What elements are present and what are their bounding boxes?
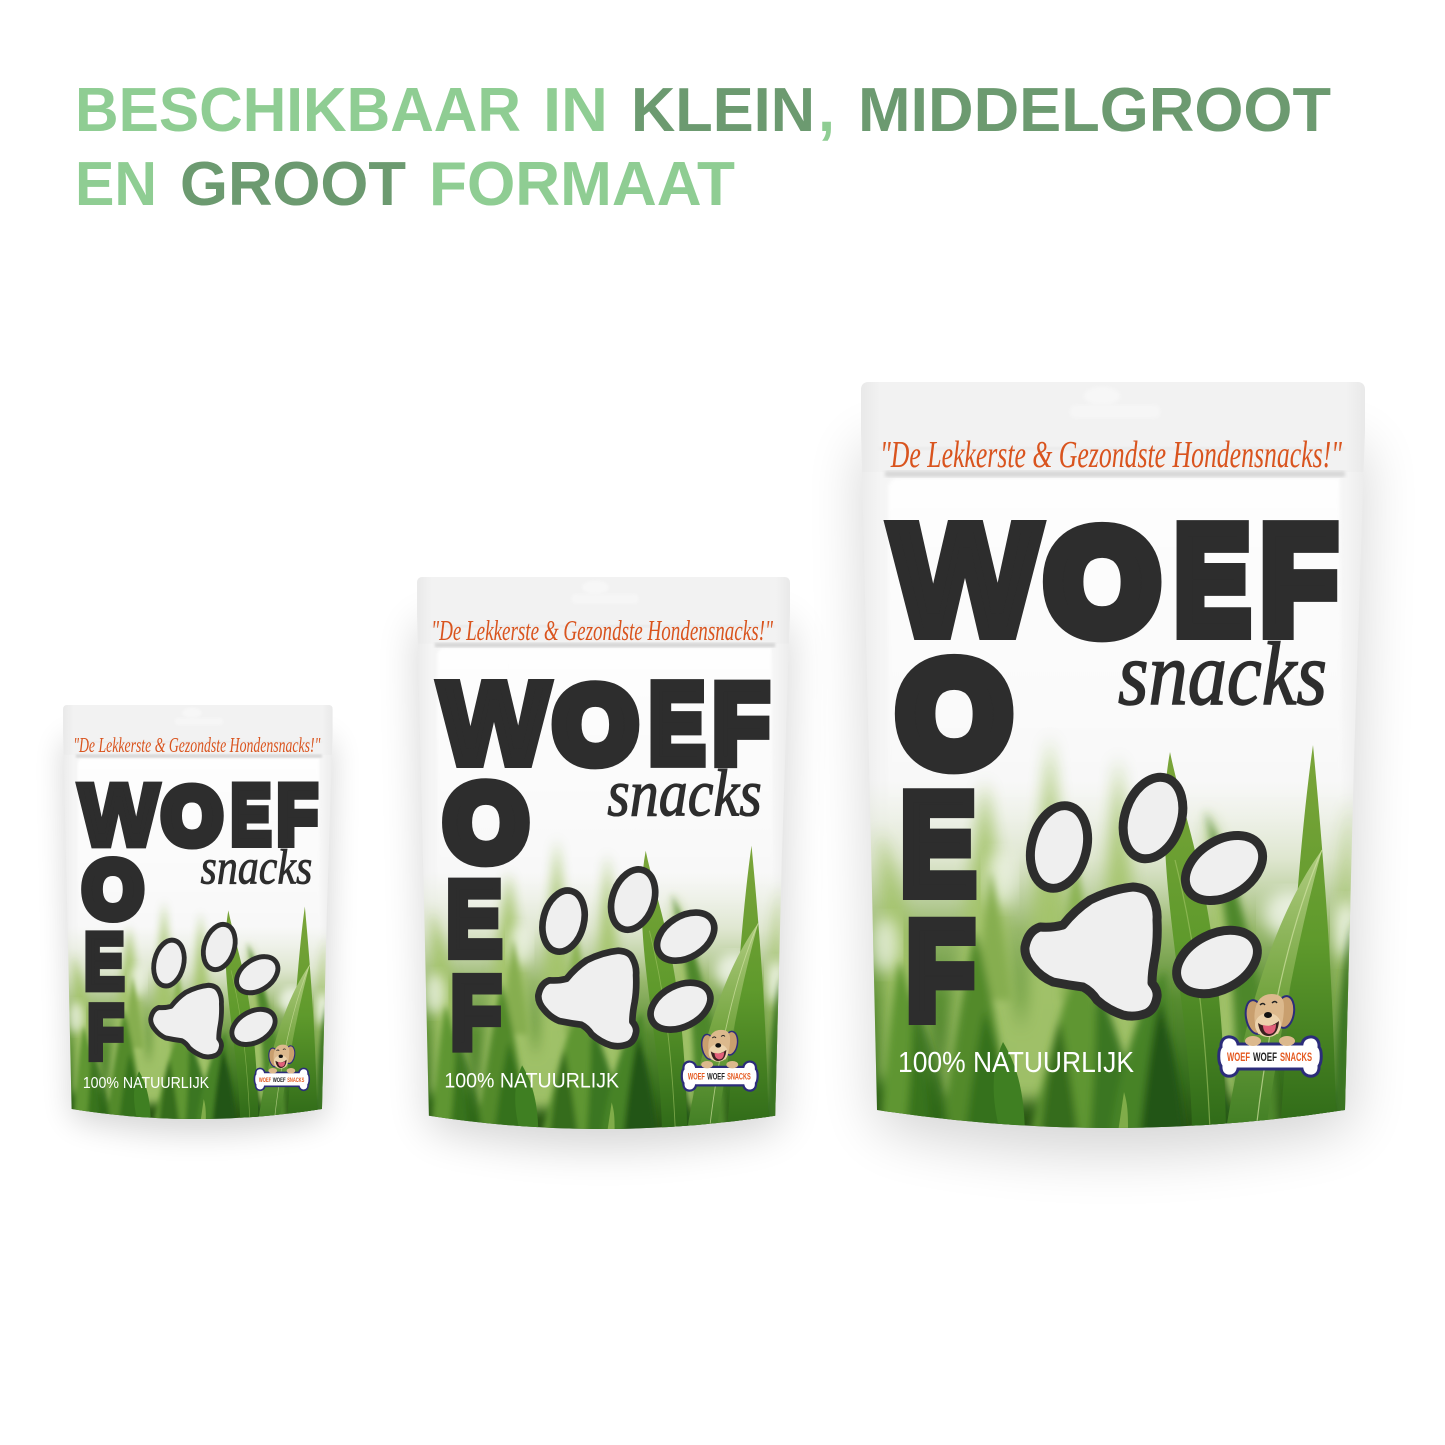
logo: dog on bone: WOEF — [1227, 1050, 1250, 1064]
brand word OEF vertical: F — [451, 957, 501, 1070]
title — [75, 76, 1331, 219]
logo: dog on bone — [254, 1045, 309, 1090]
tagline: "De Lekkerste & Gezondste Hondensnacks!" — [431, 616, 773, 647]
title: KLEIN — [631, 76, 815, 145]
brand word WOEF horizontal: F — [1261, 495, 1337, 664]
title: IN — [543, 76, 608, 145]
logo: dog on bone: WOEF — [1253, 1050, 1277, 1064]
brand word WOEF horizontal — [79, 767, 317, 864]
natural label: 100% NATUURLIJK — [83, 1075, 210, 1092]
snacks lettering: snacks — [1118, 625, 1327, 724]
brand word WOEF horizontal: O — [1047, 503, 1157, 662]
tagline: "De Lekkerste & Gezondste Hondensnacks!" — [73, 735, 321, 757]
brand word OEF vertical: F — [907, 895, 974, 1048]
panel: medium pouch — [413, 574, 794, 1148]
brand word OEF vertical: E — [447, 861, 502, 978]
brand word OEF vertical — [899, 635, 1009, 1048]
brand word WOEF horizontal: F — [277, 768, 317, 862]
brand word WOEF horizontal: O — [555, 667, 636, 784]
panel: small pouch — [60, 703, 336, 1133]
panel: large pouch — [855, 378, 1371, 1154]
brand word WOEF horizontal: W — [891, 493, 1040, 668]
title: EN — [75, 150, 157, 219]
title: BESCHIKBAAR — [75, 76, 521, 145]
title: GROOT — [180, 150, 406, 219]
brand word WOEF horizontal: E — [649, 661, 705, 786]
brand word OEF vertical: O — [899, 635, 1009, 794]
logo: dog on bone — [1219, 994, 1321, 1076]
logo: dog on bone: WOEF — [688, 1071, 705, 1081]
logo: dog on bone — [682, 1030, 758, 1091]
natural label: 100% NATUURLIJK — [898, 1047, 1135, 1079]
title: FORMAAT — [429, 150, 735, 219]
brand word OEF vertical: O — [83, 846, 142, 934]
brand word WOEF horizontal: F — [713, 661, 769, 786]
brand word WOEF horizontal: O — [163, 773, 222, 861]
natural label: 100% NATUURLIJK — [444, 1069, 620, 1093]
brand word WOEF horizontal: W — [439, 658, 549, 788]
logo: dog on bone: WOEF — [273, 1077, 286, 1084]
logo: dog on bone: SNACKS — [727, 1071, 751, 1081]
icon: paw print — [1022, 769, 1274, 1016]
brand word OEF vertical: E — [901, 765, 975, 924]
brand word WOEF horizontal: E — [1175, 495, 1250, 664]
logo: dog on bone: WOEF — [259, 1077, 271, 1084]
brand word OEF vertical: E — [84, 918, 124, 1006]
brand word OEF vertical: F — [88, 989, 123, 1074]
logo: dog on bone: SNACKS — [1280, 1050, 1312, 1064]
logo: dog on bone: WOEF — [707, 1071, 725, 1081]
icon: paw print — [149, 920, 284, 1057]
snacks lettering: snacks — [201, 839, 312, 895]
brand word WOEF horizontal — [891, 493, 1337, 668]
brand word WOEF horizontal: E — [231, 768, 271, 862]
title: MIDDELGROOT — [858, 76, 1331, 145]
brand word WOEF horizontal: W — [79, 767, 159, 864]
brand word OEF vertical — [83, 846, 142, 1074]
snacks lettering: snacks — [607, 757, 762, 830]
brand word OEF vertical: O — [445, 765, 527, 882]
icon: paw print — [536, 863, 723, 1046]
title: , — [818, 76, 835, 145]
brand word WOEF horizontal — [439, 658, 769, 788]
logo: dog on bone: SNACKS — [287, 1077, 305, 1084]
brand word OEF vertical — [445, 765, 527, 1070]
